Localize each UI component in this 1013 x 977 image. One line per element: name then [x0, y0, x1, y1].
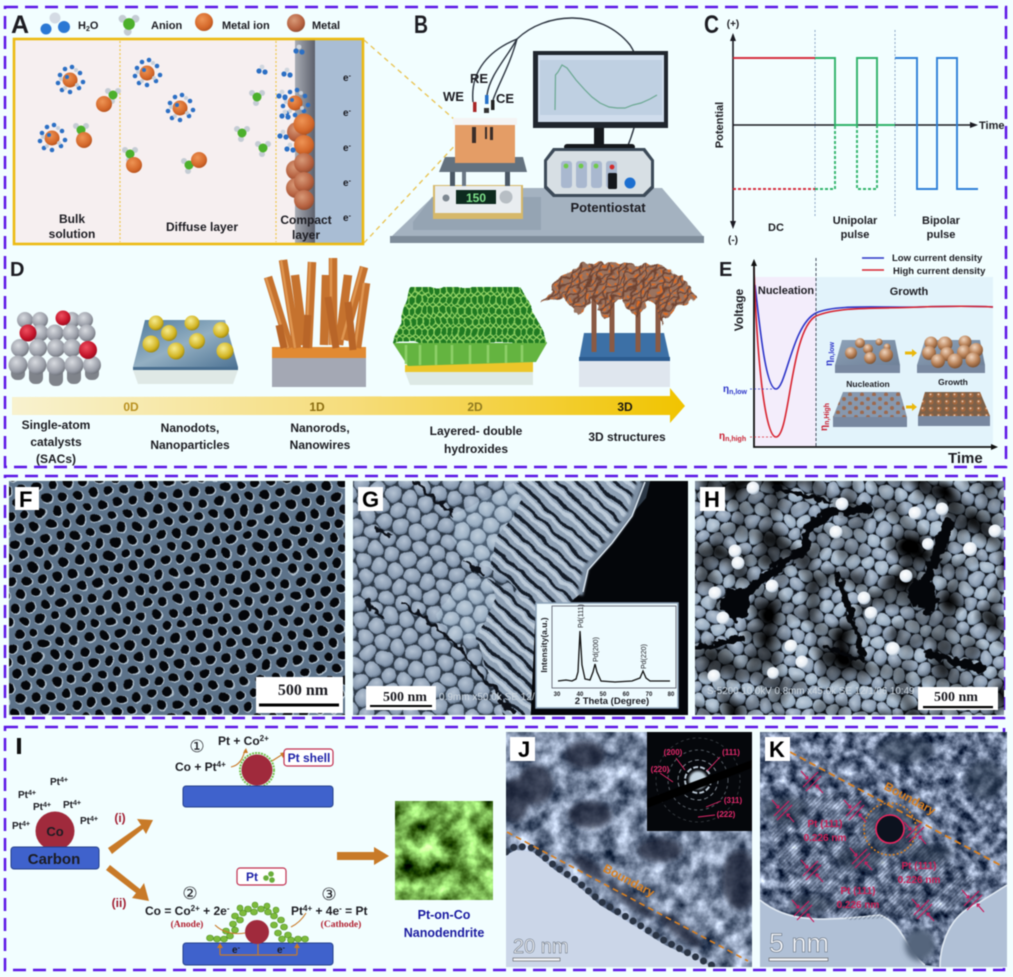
- starting state: Co on carbon: Pt: [33, 802, 43, 813]
- XRD inset chart: Pd(220): [641, 644, 648, 669]
- result label: [404, 908, 484, 940]
- model: 3D dendritic structure: [542, 262, 697, 387]
- waveform labels: [768, 215, 961, 241]
- route ii: galvanic dendrite growth: -: [339, 904, 342, 913]
- panel frame: top schematic group: [5, 7, 1006, 467]
- structure labels: (SACs): [36, 452, 76, 466]
- starting state: Co on carbon: Pt: [50, 777, 60, 788]
- electrode labels: CE: [496, 91, 514, 106]
- dimensionality arrow: 1D: [309, 400, 325, 414]
- SAED inset: (200): [664, 748, 683, 757]
- lattice spacing markers: [772, 771, 984, 922]
- panel letter H: [700, 487, 725, 512]
- structure labels: Layered- double: [430, 424, 523, 438]
- panel letter G: G: [362, 487, 379, 512]
- panel letter K: [765, 737, 790, 762]
- starting state: Co on carbon: 4+: [90, 816, 98, 823]
- inset: low overpotential nuclei and growth: [824, 336, 985, 373]
- instrument caption: S-5200 10.0kV 0.8mm x45.0k SE 12/1/06 10:49: [707, 686, 914, 697]
- electrode labels: [443, 71, 514, 106]
- hot plate stirrer: 150: [466, 191, 486, 205]
- XRD inset chart: 50: [600, 692, 607, 698]
- electron labels: e: [343, 143, 349, 154]
- unipolar pulse waveform: [815, 58, 895, 189]
- dimensionality arrow: [12, 388, 685, 423]
- panel I: Pt-on-Co deposition scheme: [11, 734, 493, 965]
- phase labels: Nucleation: [758, 285, 814, 297]
- SAED inset: (311): [724, 796, 742, 805]
- metal deposit stack at compact layer: [276, 88, 314, 210]
- panel frame: SEM images: [5, 476, 1004, 718]
- fracture highlight: [583, 482, 645, 592]
- electron labels: -: [349, 143, 352, 150]
- XRD inset chart: 40: [577, 692, 584, 698]
- axes: (+): [727, 19, 739, 30]
- route ii: galvanic dendrite growth: -: [283, 945, 286, 952]
- result label: Pt-on-Co: [418, 908, 471, 922]
- electron labels: -: [349, 178, 352, 185]
- route labels: (ii): [112, 896, 126, 910]
- model: nanodots on substrate: [133, 316, 238, 384]
- electron labels: -: [349, 213, 352, 220]
- panel J: TEM with boundary and SAED: [501, 732, 758, 967]
- route ii: galvanic dendrite growth: 2+: [191, 904, 200, 913]
- inset: high overpotential nuclei and growth: Growth: [938, 377, 968, 387]
- boundary marker: Boundary: [882, 779, 938, 818]
- dark background region: [530, 480, 688, 716]
- electron labels: e: [343, 108, 349, 119]
- hydrated metal ions: [38, 58, 195, 152]
- SAED inset: (111): [722, 748, 740, 757]
- zoom guide lines: [364, 40, 460, 243]
- Pt legend: Pt: [246, 870, 258, 884]
- panel letter J: J: [518, 737, 530, 762]
- potentiostat: [544, 148, 654, 197]
- panel A: electric double layer: [11, 11, 460, 244]
- starting state: Co on carbon: Pt: [80, 816, 90, 827]
- dimensionality arrow: 2D: [467, 400, 483, 414]
- structure labels: Single-atom: [22, 418, 90, 432]
- lattice labels: 0.226 nm: [898, 875, 941, 886]
- starting state: Co on carbon: Pt: [12, 821, 22, 832]
- waveform labels: pulse: [841, 229, 869, 241]
- legend: species: O: [90, 20, 99, 32]
- potentiostat label: Potentiostat: [570, 200, 646, 215]
- starting state: Co on carbon: Pt: [18, 790, 28, 801]
- panel letter A: A: [11, 11, 29, 39]
- axes: (-): [728, 235, 738, 246]
- TEM image: [501, 732, 758, 967]
- phase labels: Growth: [890, 286, 929, 298]
- starting state: Co on carbon: 4+: [28, 790, 36, 797]
- legend: species: [40, 12, 340, 36]
- panel letter F: [15, 487, 39, 512]
- route ii: galvanic dendrite growth: -: [227, 904, 230, 913]
- panel letter F: F: [19, 487, 32, 512]
- panel letter H: H: [704, 487, 720, 512]
- electron labels: [343, 73, 352, 224]
- layer labels: [49, 212, 332, 242]
- axis labels: n,low: [729, 389, 748, 396]
- instrument caption: 0.9mm x50.0k SE 12/: [439, 692, 535, 703]
- XRD inset chart: 80: [668, 692, 675, 698]
- layer labels: layer: [292, 228, 320, 242]
- Co core markers: [864, 803, 916, 855]
- panel letter B: B: [414, 11, 428, 39]
- XRD inset chart: 70: [646, 692, 653, 698]
- XRD inset chart: [536, 603, 678, 708]
- electrode labels: RE: [470, 71, 488, 86]
- waveform labels: pulse: [927, 229, 955, 241]
- route ii: galvanic dendrite growth: 4+: [303, 904, 312, 913]
- axis labels: η: [719, 431, 725, 442]
- route i: Pt shell on Co: 2+: [260, 734, 269, 743]
- route i: Pt shell on Co: Pt + Co: [218, 734, 260, 748]
- structure labels: [22, 418, 666, 466]
- phase labels: [758, 285, 929, 298]
- route ii: galvanic dendrite growth: -: [238, 945, 241, 952]
- panel letter E: E: [719, 259, 732, 281]
- structure labels: Nanoparticles: [150, 438, 230, 452]
- layer labels: Compact: [280, 213, 332, 227]
- lattice labels: 0.226 nm: [837, 900, 880, 911]
- DC waveform: [733, 58, 815, 189]
- scale bar: 500 nm: [366, 686, 436, 710]
- axes: [714, 19, 1004, 246]
- axis labels: [719, 288, 983, 467]
- route ii: galvanic dendrite growth: e: [232, 945, 238, 956]
- route i: Pt shell on Co: Co + Pt: [175, 760, 217, 774]
- scale bar: 500 nm: 500 nm: [278, 682, 329, 699]
- starting state: Co on carbon: 4+: [43, 802, 51, 809]
- cables: [473, 18, 641, 176]
- waveform labels: Bipolar: [922, 215, 961, 227]
- panel H: nanoparticle SEM: [694, 480, 1005, 716]
- waveform labels: DC: [768, 222, 784, 234]
- layer labels: solution: [49, 227, 95, 241]
- inset: high overpotential nuclei and growth: Nucleation: [846, 379, 890, 389]
- starting state: Co on carbon: 4+: [73, 800, 81, 807]
- XRD inset chart: 30: [554, 692, 561, 698]
- phase backgrounds: [755, 277, 993, 447]
- route labels: (i): [114, 811, 126, 825]
- route labels: [112, 811, 126, 910]
- structure labels: 3D structures: [588, 430, 666, 444]
- starting state: Co on carbon: Carbon: [28, 851, 80, 868]
- structure labels: Nanorods,: [290, 421, 350, 435]
- XRD inset chart: Intensity(a.u.): [539, 617, 549, 673]
- route ii: galvanic dendrite growth: ②: [182, 884, 198, 904]
- boundary marker: [507, 832, 748, 961]
- route ii: galvanic dendrite growth: (Anode): [171, 919, 203, 930]
- bipolar pulse waveform: [895, 58, 978, 189]
- route ii: galvanic dendrite growth: Co = Co: [145, 904, 191, 918]
- dimensionality arrow: 0D: [123, 400, 139, 414]
- legend: species: 2: [86, 26, 90, 33]
- route ii: galvanic dendrite growth: [145, 884, 368, 965]
- boundary marker: [790, 752, 1000, 865]
- electron labels: e: [343, 213, 349, 224]
- panel letter K: K: [769, 737, 785, 762]
- route ii: galvanic dendrite growth: (Cathode): [321, 919, 361, 930]
- bright fractured edge: [580, 482, 640, 595]
- legend: Low current density: [892, 253, 983, 264]
- scale bar: 500 nm: 500 nm: [934, 690, 978, 705]
- scale bar: 20 nm: 20 nm: [513, 936, 569, 958]
- panel letter G: [358, 487, 383, 512]
- panel B: three-electrode cell and potentiostat: [390, 11, 704, 243]
- route i: Pt shell on Co: [175, 734, 333, 807]
- lattice labels: 0.226 nm: [804, 833, 847, 844]
- legend: High current density: [893, 266, 986, 277]
- route ii: galvanic dendrite growth: e: [277, 945, 283, 956]
- starting state: Co on carbon: 4+: [60, 777, 68, 784]
- lattice labels: [804, 819, 941, 911]
- route ii: galvanic dendrite growth: = Pt: [342, 904, 368, 918]
- scale bar: 500 nm: [918, 687, 998, 710]
- HRTEM image: [760, 732, 1007, 967]
- panel frame: Pt-on-Co and TEM: [5, 727, 1004, 970]
- XRD inset chart: 2 Theta (Degree): [575, 696, 649, 707]
- model: layered double hydroxide: [393, 287, 547, 385]
- starting state: Co on carbon: [11, 777, 99, 869]
- axis labels: Voltage: [732, 288, 746, 331]
- SEM image: sphere clusters with voids: [694, 480, 1005, 716]
- electrochemical cell: [453, 95, 517, 163]
- electron labels: e: [343, 178, 349, 189]
- boundary marker: Boundary: [601, 861, 657, 900]
- section dividers: [815, 30, 895, 218]
- lattice labels: Pt (111): [901, 861, 937, 872]
- metal ion and anion pairs: [73, 45, 305, 174]
- SAED inset: [647, 732, 752, 831]
- panel letter J: [510, 737, 535, 762]
- legend: species: H: [78, 20, 86, 32]
- panel K: HRTEM lattice fringes: [760, 732, 1007, 967]
- route i: Pt shell on Co: Pt shell: [288, 751, 330, 765]
- starting state: Co on carbon: 4+: [22, 821, 30, 828]
- axes: Potential: [714, 102, 726, 148]
- panel G: nanorod array SEM with XRD inset: [352, 480, 689, 716]
- electrode labels: WE: [443, 89, 464, 104]
- route arrows: [106, 819, 389, 901]
- panel C: waveforms: [704, 11, 1004, 246]
- structure labels: catalysts: [30, 435, 82, 449]
- panel E: nucleation voltage curve: [719, 253, 998, 467]
- route i: Pt shell on Co: ①: [189, 737, 205, 757]
- SAED inset: (220): [651, 765, 670, 774]
- result label: Nanodendrite: [404, 926, 484, 940]
- structure labels: Nanodots,: [161, 421, 219, 435]
- XRD inset chart: Pd(200): [593, 637, 600, 662]
- inset: low overpotential nuclei and growth: n,low: [829, 341, 836, 360]
- SEM image: rods and caps: [352, 480, 651, 716]
- XRD inset chart: 60: [623, 692, 630, 698]
- inset: high overpotential nuclei and growth: n,High: [824, 403, 831, 425]
- panel F: porous anodic template SEM: [8, 480, 346, 716]
- axis labels: n,high: [725, 436, 746, 443]
- result micrograph: green TEM: [395, 801, 493, 900]
- bench: [390, 188, 704, 243]
- curves: [754, 268, 993, 437]
- monitor with transient curve: [533, 51, 668, 150]
- scale bar: 500 nm: 500 nm: [383, 690, 427, 705]
- scale bar: 5 nm: 5 nm: [769, 928, 829, 958]
- dimensionality arrow: 3D: [617, 400, 633, 414]
- route ii: galvanic dendrite growth: + 2e: [200, 904, 227, 918]
- route ii: galvanic dendrite growth: Pt: [291, 904, 303, 918]
- legend: species: Anion: [151, 20, 182, 32]
- panel D: dimensional nanostructures: [8, 258, 697, 466]
- panel letter I: [17, 738, 21, 754]
- panel letter C: C: [704, 11, 719, 39]
- starting state: Co on carbon: Co: [46, 824, 64, 839]
- axis labels: η: [723, 384, 729, 395]
- SEM image: honeycomb pores: [8, 480, 346, 716]
- inset: high overpotential nuclei and growth: [819, 377, 990, 431]
- inset: low overpotential nuclei and growth: η: [824, 360, 835, 366]
- SAED inset: (222): [717, 810, 736, 819]
- route i: Pt shell on Co: 4+: [217, 760, 226, 769]
- layer labels: Diffuse layer: [166, 220, 238, 234]
- electron labels: -: [349, 73, 352, 80]
- Pt legend: [237, 868, 286, 885]
- waveform labels: Unipolar: [833, 215, 878, 227]
- electron labels: -: [349, 108, 352, 115]
- scale bar: 500 nm: [256, 677, 343, 713]
- legend: [862, 253, 986, 277]
- model: single-atom catalyst: [8, 310, 101, 386]
- inset: high overpotential nuclei and growth: η: [819, 425, 830, 431]
- legend: species: Metal ion: [222, 20, 270, 32]
- starting state: Co on carbon: Pt: [63, 800, 73, 811]
- panel letter D: D: [10, 259, 24, 281]
- lattice labels: Pt (111): [840, 886, 876, 897]
- axes and boundary: [750, 258, 998, 450]
- axes: Time: [979, 120, 1004, 132]
- layer labels: Bulk: [59, 212, 85, 226]
- model: nanorods: [266, 258, 366, 387]
- structure labels: Nanowires: [290, 438, 351, 452]
- diagram box: solution to electrode: [14, 39, 363, 244]
- route ii: galvanic dendrite growth: + 4e: [312, 904, 339, 918]
- electron labels: e: [343, 73, 349, 84]
- lattice labels: Pt (111): [807, 819, 843, 830]
- route ii: galvanic dendrite growth: ③: [321, 885, 337, 905]
- legend: species: Metal: [312, 20, 340, 32]
- axis labels: Time: [948, 450, 983, 467]
- structure labels: hydroxides: [444, 442, 508, 456]
- XRD inset chart: Pd(111): [578, 604, 585, 628]
- hot plate stirrer: [433, 157, 527, 219]
